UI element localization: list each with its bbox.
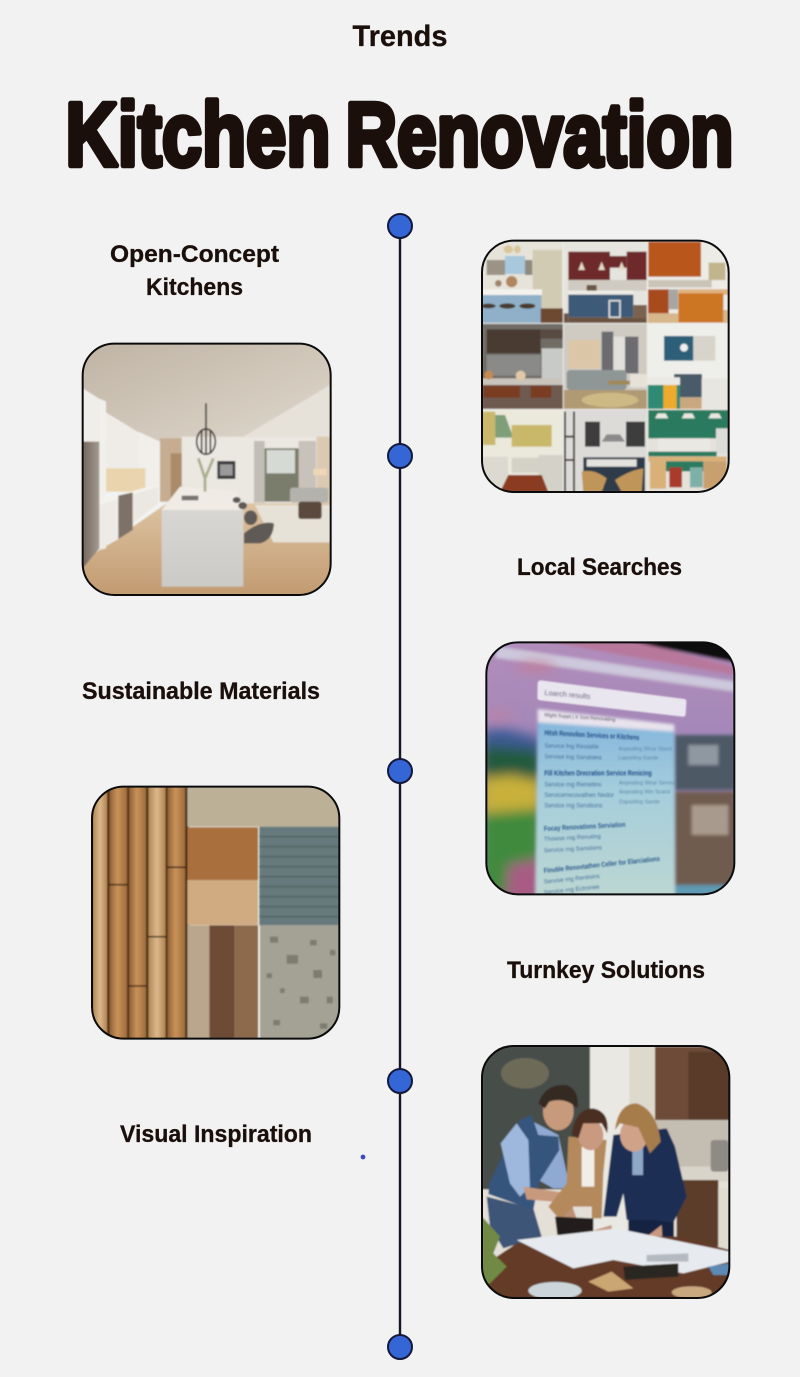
stone top sample — [187, 787, 339, 827]
person centre — [548, 1108, 608, 1235]
blurred search results text: Hitsh Renovlion Services or Kitchens — [544, 728, 640, 742]
main title: Kitchen — [66, 85, 330, 185]
label: Sustainable Materials: Sustainable Materials — [82, 678, 320, 705]
photo: sustainable material samples — [92, 787, 339, 1039]
label: Open-Concept Kitchens: Open-Concept — [110, 241, 279, 268]
countertop and lower cabinets — [677, 1167, 730, 1250]
collage cell: dark shelving kitchen — [482, 323, 563, 409]
collage cell: living room — [563, 323, 647, 409]
blurred search results text: Thowse rng Renuting — [544, 834, 601, 843]
collage cell: grey kitchen with wicker chairs — [563, 409, 647, 492]
collage cell: orange kitchen — [647, 241, 729, 323]
photo: designers reviewing blueprints — [480, 1045, 732, 1300]
ceiling — [80, 342, 333, 442]
photo: open-concept kitchen — [80, 342, 333, 595]
bar stools — [233, 497, 274, 543]
blurred search results text — [543, 712, 676, 896]
table — [482, 1237, 730, 1300]
floor — [83, 503, 333, 595]
blurred search results text: Lapseting Sande — [618, 756, 658, 762]
fridge — [83, 442, 99, 568]
sofa — [290, 488, 328, 519]
collage cell: green kitchen — [647, 409, 729, 492]
blurred search results text: Service fng Restalile — [544, 744, 600, 751]
glass results panel — [535, 709, 675, 897]
right side photos — [535, 709, 735, 897]
blurred search results text: Service rng Ectronee — [544, 884, 600, 896]
blurred search results text: Service rng Servitions — [544, 804, 603, 810]
main title — [66, 85, 734, 185]
coffee maker — [711, 1140, 729, 1172]
heading: Trends: Trends — [352, 20, 448, 53]
blurred search results text: Service rng Sanstions — [544, 845, 602, 854]
timeline node 2 — [388, 444, 412, 468]
slate sample — [259, 827, 339, 925]
blurred search results text: Finuble Renovtathen Celler for Elarciations — [543, 856, 660, 875]
backsplash — [655, 1120, 730, 1167]
photo: kitchen collage — [480, 238, 732, 495]
blurred search results text: Anpeating Wear Stand — [618, 746, 672, 752]
timeline node 1 — [388, 214, 412, 238]
dark monitor corner — [632, 643, 732, 664]
plant — [482, 1217, 507, 1287]
blueprints — [517, 1228, 730, 1273]
timeline — [388, 214, 412, 1359]
blurred search results text: Dapseting Sande — [619, 800, 660, 806]
marble island — [162, 487, 243, 587]
sand sample — [187, 880, 258, 925]
wood samples — [187, 925, 258, 1039]
blurred search results text: Fill Kitchen Drecration Service Renicing — [544, 771, 652, 778]
label: Open-Concept Kitchens — [110, 241, 279, 301]
picture frame — [217, 461, 235, 479]
label: Turnkey Solutions: Turnkey Solutions — [507, 957, 705, 984]
blurred search results text: Servise mg Rentisins — [544, 874, 600, 886]
white kitchen cabinetry — [83, 388, 182, 550]
vase plant — [198, 458, 213, 492]
upper cabinets — [655, 1047, 730, 1120]
rug — [255, 505, 332, 542]
person left — [487, 1085, 591, 1248]
blurred search results text: Anpeating Wear Service — [619, 780, 676, 786]
blurred search results text: Servise tng Sanataea — [544, 754, 602, 761]
timeline node 3 — [388, 759, 412, 783]
terrazzo sample — [260, 925, 339, 1039]
label: Local Searches: Local Searches — [517, 554, 682, 581]
window and curtains — [254, 441, 327, 503]
blurred search results text: Might Suppt | X Sort Renovating — [544, 712, 616, 723]
search box — [537, 680, 686, 717]
photo: local search results screen — [482, 640, 738, 902]
search box: Loarch results — [544, 688, 591, 701]
label: Open-Concept Kitchens: Kitchens — [146, 274, 243, 301]
browser bar — [495, 647, 735, 692]
bamboo strips — [92, 787, 189, 1039]
blurred search results text: Servicerrecovathen Nedor — [544, 793, 614, 799]
timeline node 4 — [388, 1069, 412, 1093]
back wall — [182, 437, 332, 507]
pendant lamp — [197, 403, 215, 454]
blurred search results text: Focay Renovations Serviation — [544, 822, 626, 833]
blurred search results text: Anpeating Win Scand — [619, 790, 670, 796]
collage cell: maroon and navy kitchen — [563, 241, 647, 323]
person right — [588, 1103, 687, 1247]
collage cell: blue island kitchen — [481, 241, 563, 323]
collage cell: teal and yellow kitchen — [647, 323, 729, 409]
label: Visual Inspiration: Visual Inspiration — [120, 1121, 312, 1148]
blurred search results text: Service rng Remetins — [544, 783, 602, 789]
collage cell: green hood kitchen — [482, 409, 563, 492]
material samples — [528, 1263, 730, 1299]
room background — [480, 1045, 732, 1300]
small blue dot — [361, 1155, 365, 1159]
landscape and clouds — [482, 663, 555, 902]
timeline node 5 — [388, 1335, 412, 1359]
terracotta sample — [187, 827, 258, 880]
